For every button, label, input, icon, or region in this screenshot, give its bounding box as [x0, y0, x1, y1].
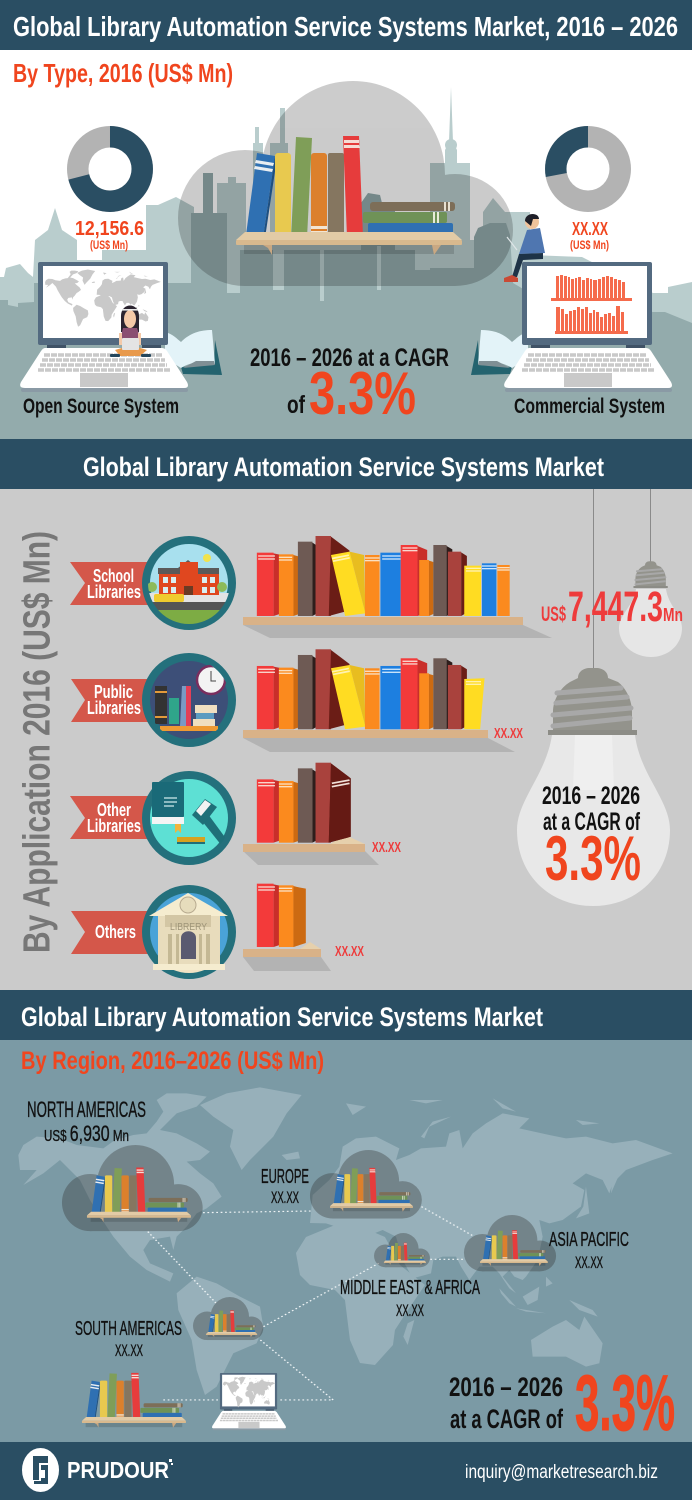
skyline: pale gaps under shelf [227, 245, 430, 301]
value: public libraries: XX.XX [494, 725, 523, 742]
region: south americas [75, 1297, 263, 1360]
region: europe [261, 1150, 422, 1219]
row 4: others: LIBRERY [170, 922, 207, 933]
row 1: school libraries: School [93, 566, 134, 586]
figure: man on laptop [504, 214, 545, 282]
world map [18, 1087, 673, 1395]
vertical heading: by application: By Application 2016 (US$ Mn) [16, 531, 58, 953]
row 4: others: Others [95, 922, 136, 942]
value: school libraries: Mn [663, 605, 683, 625]
region: north americas [27, 1097, 203, 1231]
row 1: book bar [243, 536, 552, 638]
callout: region CAGR [449, 1358, 675, 1447]
row 4: book bar [243, 884, 331, 971]
figure: woman with laptop [110, 306, 151, 357]
big cloud behind shelf [178, 81, 513, 286]
small light bulb [619, 489, 682, 657]
row 1: school libraries [70, 540, 235, 630]
callout: CAGR [250, 344, 449, 427]
region: asia pacific: ASIA PACIFIC [549, 1229, 629, 1251]
callout: region CAGR: at a CAGR of [450, 1404, 564, 1434]
callout: CAGR: 2016 – 2026 at a CAGR [250, 344, 449, 372]
donut: open source [67, 126, 153, 212]
heading: by type: By Type, 2016 (US$ Mn) [13, 58, 233, 88]
section 3 header bar [0, 990, 692, 1040]
heading: by region: By Region, 2016–2026 (US$ Mn) [21, 1047, 324, 1075]
logo [22, 1448, 173, 1492]
region: middle east and africa: MIDDLE EAST & AFRICA [340, 1277, 480, 1299]
row 2: public libraries: Public [94, 682, 133, 702]
region: north americas: US$ 6,930 Mn [44, 1121, 129, 1146]
row 3: other libraries [70, 775, 232, 861]
icon: open book right [471, 330, 528, 375]
connector lines [148, 1207, 474, 1400]
region: south americas: XX.XX [115, 1341, 143, 1360]
row 3: other libraries: Other [97, 800, 131, 820]
row 3: other libraries: Libraries [87, 816, 141, 836]
value: commercial: XX.XX [572, 219, 608, 239]
callout: bulb CAGR: 3.3% [545, 824, 641, 894]
section 1 background [0, 50, 692, 440]
region: asia pacific: XX.XX [575, 1253, 603, 1272]
region: europe: EUROPE [261, 1166, 309, 1188]
row 2: public libraries [71, 657, 232, 743]
callout: bulb CAGR: 2016 – 2026 [542, 782, 640, 810]
value: other libraries: XX.XX [372, 839, 401, 856]
donut: commercial [545, 126, 631, 212]
skyline: pale back layer [0, 87, 692, 400]
header bar [0, 0, 692, 50]
icon: open book left [165, 330, 222, 375]
logo: PRUDOUR [67, 1457, 169, 1483]
laptop: book chart [504, 262, 672, 392]
section 3 header bar: Global Library Automation Service Systems Market [21, 1002, 543, 1032]
big light bulb [517, 489, 670, 906]
row 3: book bar [243, 763, 379, 865]
region: north americas: NORTH AMERICAS [27, 1097, 146, 1122]
callout: bulb CAGR [542, 782, 641, 894]
laptop: world map [20, 262, 188, 392]
region: south americas: SOUTH AMERICAS [75, 1318, 182, 1340]
value: commercial [570, 219, 609, 252]
callout: region CAGR: 2016 – 2026 [449, 1372, 563, 1402]
region: asia pacific [464, 1215, 629, 1272]
section 2 header bar [0, 439, 692, 489]
value: others: XX.XX [335, 943, 364, 960]
row 4: others [71, 889, 235, 977]
small laptop [212, 1373, 286, 1430]
callout: CAGR: 3.3% [309, 360, 416, 427]
section 3 background [0, 1040, 692, 1442]
region: middle east and africa: XX.XX [396, 1301, 424, 1320]
value: school libraries: US$ [541, 603, 566, 626]
callout: CAGR: of [287, 391, 306, 419]
row 1: school libraries: Libraries [87, 582, 141, 602]
region: middle east and africa [340, 1233, 480, 1320]
row 2: book bar [243, 649, 515, 752]
value: commercial: (US$ Mn) [570, 238, 609, 252]
footer bar [0, 1442, 692, 1500]
value: open source: (US$ Mn) [90, 238, 128, 252]
label: open source system: Open Source System [23, 395, 179, 418]
region: europe: XX.XX [271, 1188, 299, 1207]
value: open source: 12,156.6 [75, 218, 144, 240]
skyline: front layer and ground [0, 173, 692, 440]
value: open source [75, 218, 144, 252]
section 2 background [0, 489, 692, 990]
row 2: public libraries: Libraries [87, 698, 141, 718]
bookshelf [236, 136, 462, 255]
standalone bookshelf [82, 1373, 186, 1428]
